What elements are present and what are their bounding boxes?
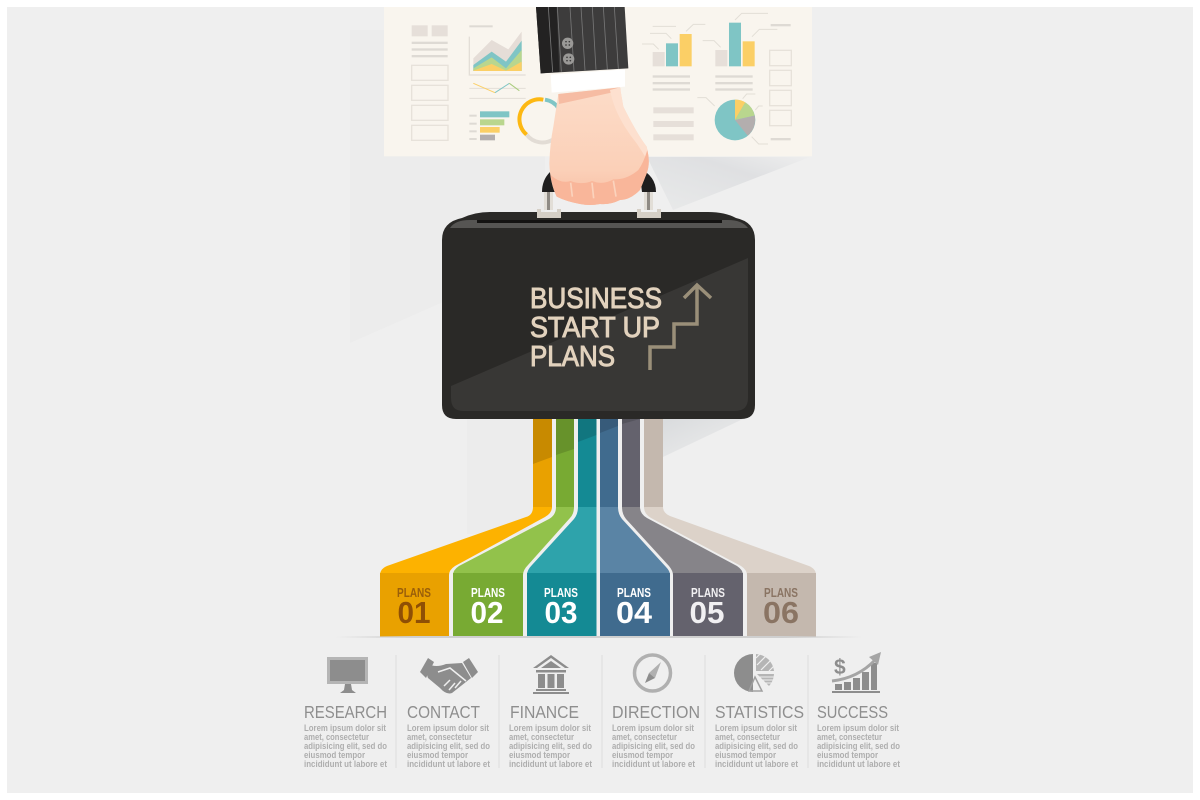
column chart right (703, 13, 777, 91)
contact body text (407, 723, 490, 769)
ground line under ribbons (336, 636, 862, 638)
direction body text: amet, consectetur (612, 732, 677, 742)
donut chart (519, 99, 559, 142)
finance body text: amet, consectetur (509, 732, 574, 742)
long cast shadow behind poster and briefcase (350, 30, 810, 534)
direction heading: DIRECTION (612, 702, 700, 722)
research body text: adipisicing elit, sed do (304, 741, 387, 751)
finance body text: eiusmod tempor (509, 750, 570, 760)
plan 04 label: PLANS (617, 586, 651, 600)
plan 03 label: PLANS (544, 586, 578, 600)
shirt cuff (551, 69, 625, 93)
ribbon 06 (644, 419, 816, 637)
statistics body text: incididunt ut labore et (715, 759, 798, 769)
success body text: eiusmod tempor (817, 750, 878, 760)
success body text: Lorem ipsum dolor sit (817, 723, 899, 733)
icon: growth chart with dollar: $ (834, 656, 846, 679)
success body text: adipisicing elit, sed do (817, 741, 900, 751)
contact body text: amet, consectetur (407, 732, 472, 742)
research body text: incididunt ut labore et (304, 759, 387, 769)
statistics body text: adipisicing elit, sed do (715, 741, 798, 751)
plan 05 label: 05 (690, 595, 724, 630)
briefcase title: BUSINESS (530, 283, 662, 315)
plan 01 label: 01 (398, 595, 430, 630)
icon: compass (634, 655, 670, 691)
finance heading: FINANCE (510, 702, 579, 722)
bars and small boxes (653, 24, 791, 140)
icon: bank (533, 655, 569, 694)
direction body text: adipisicing elit, sed do (612, 741, 695, 751)
success body text: amet, consectetur (817, 732, 882, 742)
column: research (304, 657, 387, 769)
plan 04 label: 04 (616, 595, 653, 630)
plan 01 label: PLANS (397, 586, 431, 600)
horizontal bar chart (469, 111, 509, 140)
contact body text: eiusmod tempor (407, 750, 468, 760)
ribbon 04 (600, 419, 670, 637)
ribbon 01 (380, 419, 552, 637)
success heading: SUCCESS (817, 702, 888, 722)
briefcase title: PLANS (530, 341, 615, 373)
fist (549, 87, 649, 205)
briefcase title: START UP (530, 312, 660, 344)
line chart (469, 83, 526, 98)
contact body text: adipisicing elit, sed do (407, 741, 490, 751)
direction body text: Lorem ipsum dolor sit (612, 723, 694, 733)
column: direction (612, 655, 700, 769)
finance body text: adipisicing elit, sed do (509, 741, 592, 751)
briefcase (442, 212, 755, 419)
briefcase title (530, 283, 662, 373)
pie chart (697, 94, 768, 144)
direction body text (612, 723, 695, 769)
finance body text: incididunt ut labore et (509, 759, 592, 769)
column: contact (407, 658, 490, 769)
research body text (304, 723, 387, 769)
direction body text: incididunt ut labore et (612, 759, 695, 769)
research body text: Lorem ipsum dolor sit (304, 723, 386, 733)
column dividers (396, 655, 808, 768)
column: success (817, 652, 900, 769)
briefcase handles (542, 168, 656, 210)
contact body text: Lorem ipsum dolor sit (407, 723, 489, 733)
hand holding the briefcase (536, 7, 649, 205)
contact heading: CONTACT (407, 702, 480, 722)
poster: business charts (384, 7, 812, 156)
column chart left (642, 24, 705, 91)
plan 06 label: 06 (763, 595, 799, 630)
suit sleeve (536, 7, 628, 73)
plan 03 label: 03 (544, 595, 578, 630)
statistics body text (715, 723, 798, 769)
icon: handshake (420, 658, 478, 693)
column: statistics (715, 654, 804, 769)
column: finance (509, 655, 592, 769)
icon: rising stairs arrow (650, 285, 711, 370)
ribbon 05 (622, 419, 743, 637)
ribbon 03 (527, 419, 596, 637)
statistics heading: STATISTICS (715, 702, 804, 722)
plan 05 label: PLANS (691, 586, 725, 600)
research body text: amet, consectetur (304, 732, 369, 742)
finance body text (509, 723, 592, 769)
ribbon 02 (453, 419, 574, 637)
colored plan ribbons (380, 419, 816, 637)
research heading: RESEARCH (304, 702, 387, 722)
icon: pie chart (734, 654, 774, 692)
plan 06 label: PLANS (764, 586, 798, 600)
statistics body text: amet, consectetur (715, 732, 780, 742)
handle mounting brackets (537, 209, 661, 218)
ribbon shadow under briefcase (533, 419, 640, 464)
contact body text: incididunt ut labore et (407, 759, 490, 769)
area chart (469, 25, 526, 75)
plan 02 label: 02 (470, 595, 504, 630)
plan 02 label: PLANS (471, 586, 505, 600)
finance body text: Lorem ipsum dolor sit (509, 723, 591, 733)
poster text blocks and form boxes (412, 25, 448, 140)
statistics body text: eiusmod tempor (715, 750, 776, 760)
icon: monitor (327, 657, 368, 693)
success body text: incididunt ut labore et (817, 759, 900, 769)
success body text (817, 723, 900, 769)
research body text: eiusmod tempor (304, 750, 365, 760)
statistics body text: Lorem ipsum dolor sit (715, 723, 797, 733)
direction body text: eiusmod tempor (612, 750, 673, 760)
